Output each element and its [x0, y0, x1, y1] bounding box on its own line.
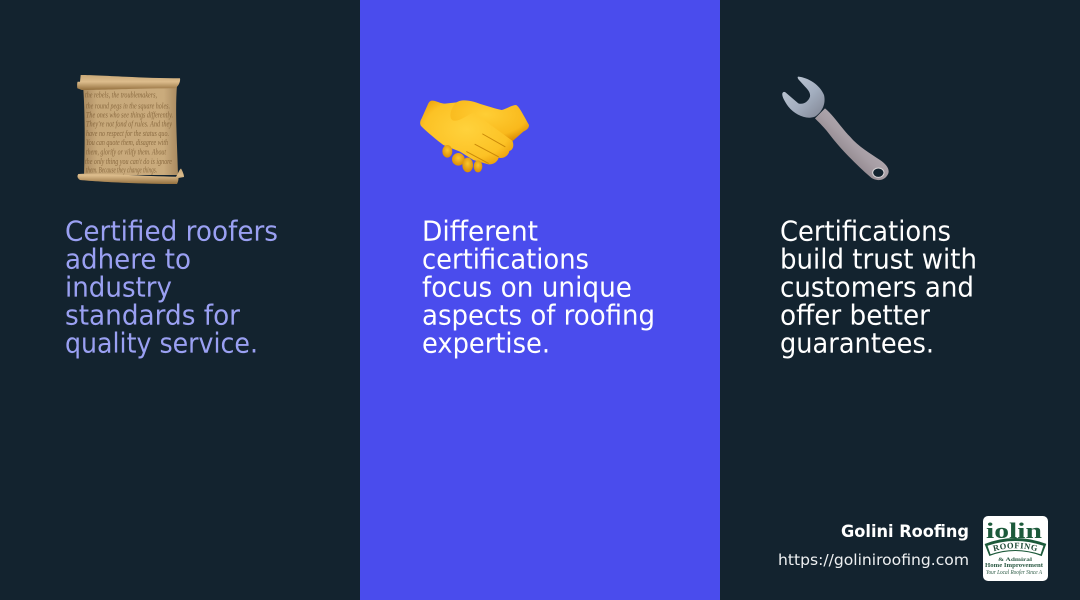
icon: parchment scroll: [77, 75, 184, 184]
panel: right background: [720, 0, 1080, 600]
icon: wrench: [782, 77, 889, 180]
panel: left background: [0, 0, 360, 600]
icon: parchment scroll: have no respect for the status quo.: [86, 128, 169, 138]
text block: right column: guarantees.: [780, 326, 934, 360]
icon: parchment scroll: The ones who see things differently.: [86, 109, 173, 119]
text block: left column: Certified roofers: [65, 214, 278, 248]
text block: left column: quality service.: [65, 326, 258, 360]
left hand: [420, 101, 513, 164]
text block: right column: [780, 214, 977, 360]
text block: middle column: [422, 214, 655, 360]
text block: right column: customers and: [780, 270, 974, 304]
text block: right column: build trust with: [780, 242, 977, 276]
footer brand name: Golini Roofing: [841, 522, 969, 542]
icon: parchment scroll: the rebels, the troublemakers,: [85, 90, 157, 100]
text block: left column: adhere to: [65, 242, 191, 276]
logo: Your Local Roofer Since A: [986, 569, 1042, 576]
icon: parchment scroll: them, glorify or vilify them. About: [86, 146, 166, 156]
logo: [983, 516, 1048, 581]
icon: parchment scroll: They're not fond of rules. And they: [86, 119, 172, 129]
text block: middle column: expertise.: [422, 326, 550, 360]
logo: Home Improvement: [985, 563, 1043, 569]
icon: handshake: [420, 100, 529, 172]
text block: middle column: certifications: [422, 242, 589, 276]
text block: right column: offer better: [780, 298, 930, 332]
icon: parchment scroll: the only thing you can't do is ignore: [85, 156, 172, 166]
text block: left column: standards for: [65, 298, 240, 332]
text block: left column: industry: [65, 270, 172, 304]
icon: parchment scroll: You can quote them, disagree with: [86, 137, 168, 147]
finger creases: [467, 134, 505, 163]
text block: middle column: Different: [422, 214, 538, 248]
lower fingers: [442, 145, 482, 172]
logo: & Admiral: [998, 557, 1033, 563]
logo: iolin: [986, 518, 1042, 543]
text block: middle column: aspects of roofing: [422, 298, 655, 332]
right hand and thumb: [450, 100, 529, 141]
icon: parchment scroll: them. Because they change things.: [86, 165, 157, 175]
footer url: https://goliniroofing.com: [778, 551, 969, 569]
panel: middle background: [360, 0, 720, 600]
text block: middle column: focus on unique: [422, 270, 632, 304]
text block: left column: [65, 214, 278, 360]
icon: parchment scroll: the round pegs in the square holes.: [86, 100, 170, 110]
text block: right column: Certifications: [780, 214, 951, 248]
logo: ROOFING: [992, 542, 1038, 552]
